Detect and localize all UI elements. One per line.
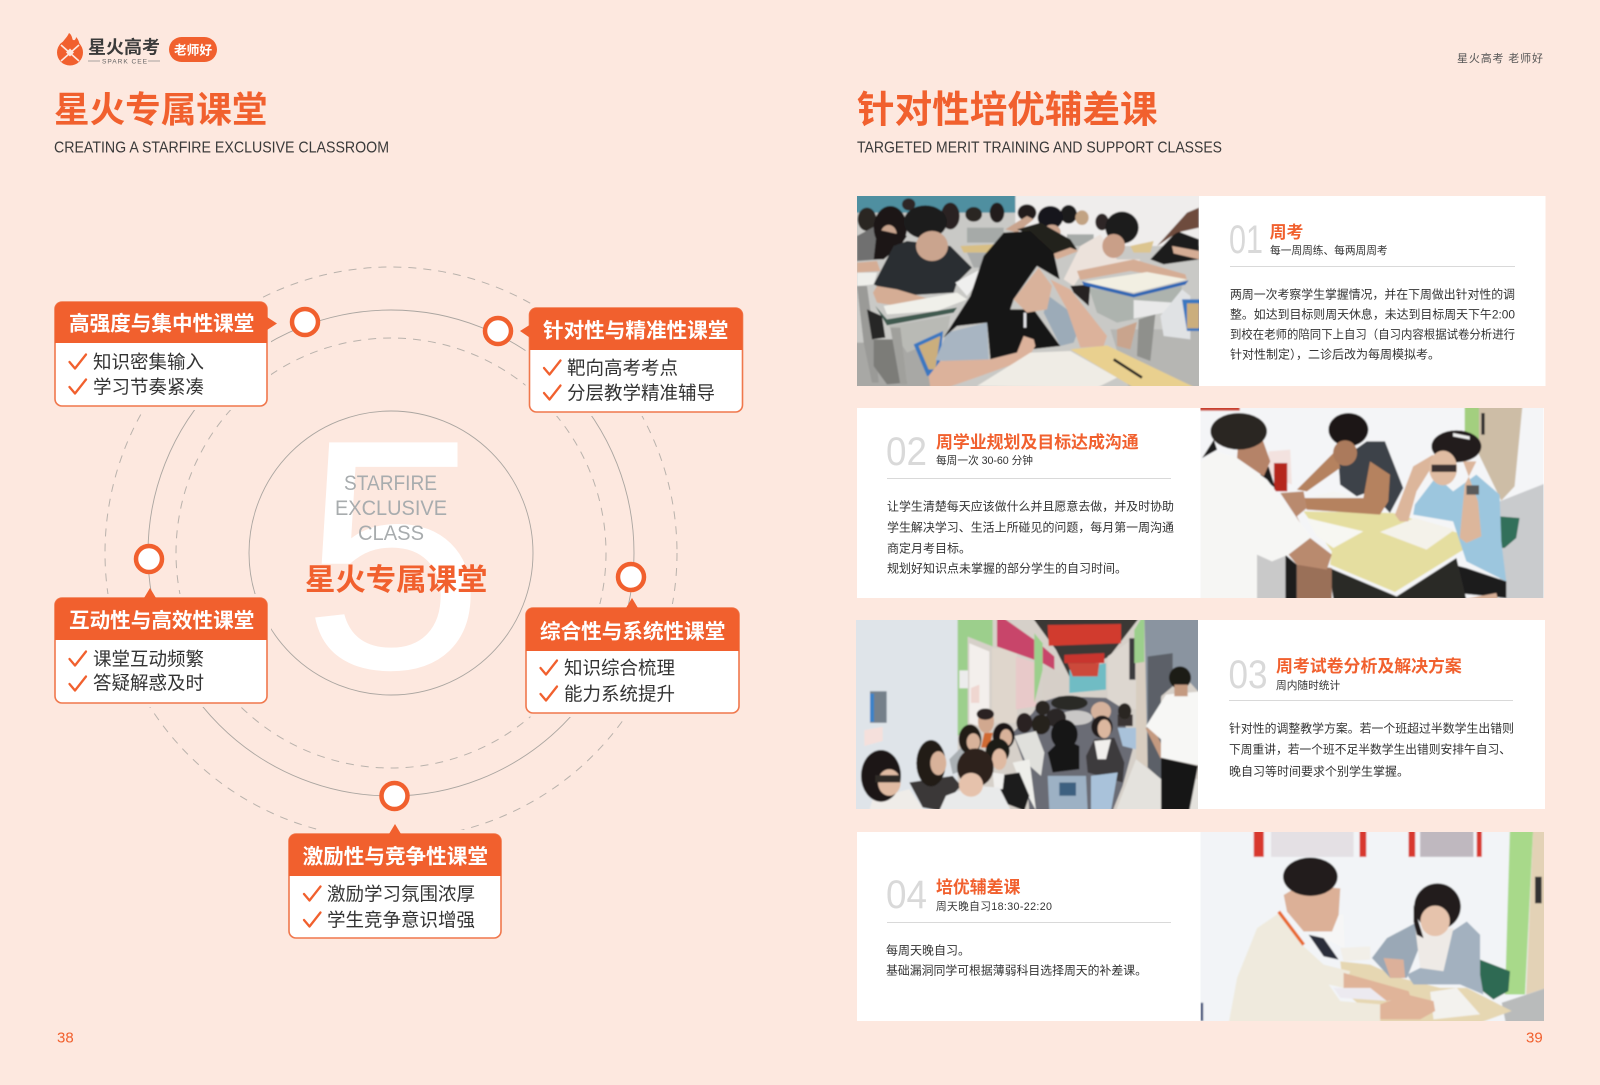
node 1 — [292, 309, 318, 335]
center English label — [335, 471, 447, 545]
node 4 — [618, 564, 644, 590]
body text — [1229, 720, 1514, 778]
panel 04: extra tutoring — [857, 825, 1550, 1028]
photo: one-on-one tutoring — [1200, 832, 1544, 1021]
card: 互动性与高效性课堂: 答疑解惑及时 — [93, 673, 204, 694]
logo badge — [169, 37, 217, 62]
panel 02: weekly planning — [857, 401, 1549, 605]
subtitle: right page: TARGETED MERIT TRAINING AND SUPPORT CLASSES — [857, 140, 1222, 156]
node 3 — [136, 546, 162, 572]
photo: teacher talking with students — [1200, 408, 1544, 598]
heading: 培优辅差课 — [936, 877, 1021, 897]
logo tagline: SPARK CEE — [102, 58, 148, 65]
big numeral 5: 5 — [302, 371, 484, 738]
card: 激励性与竞争性课堂 — [289, 824, 501, 938]
card: 激励性与竞争性课堂: 学生竞争意识增强 — [327, 910, 475, 931]
body text: 针对性制定），二诊后改为每周模拟考。 — [1230, 346, 1440, 361]
number 04: 04 — [886, 873, 927, 917]
center English label: STARFIRE — [344, 471, 437, 495]
body text: 学生解决学习、生活上所碰见的问题，每月第一周沟通 — [887, 519, 1174, 534]
panel 01: weekly test — [850, 189, 1546, 393]
center English label: EXCLUSIVE — [335, 496, 447, 520]
number 03: 03 — [1228, 653, 1268, 697]
photo: students in hallway — [856, 620, 1198, 809]
body text: 规划好知识点未掌握的部分学生的自习时间。 — [887, 560, 1127, 575]
title: right page: 针对性培优辅差课 — [857, 88, 1158, 130]
card: 针对性与精准性课堂: 分层教学精准辅导 — [567, 383, 715, 404]
icon: flame — [57, 33, 83, 66]
card: 综合性与系统性课堂 — [526, 598, 739, 713]
card: 高强度与集中性课堂: 高强度与集中性课堂 — [69, 311, 254, 335]
body text — [886, 942, 1147, 977]
diagram: five classroom features — [55, 267, 743, 938]
subheading: 每周一次 30-60 分钟 — [936, 454, 1033, 467]
body text: 两周一次考察学生掌握情况，并在下周做出针对性的调 — [1230, 286, 1515, 301]
body text: 整。如达到目标则周天休息，未达到目标周天下午2:00 — [1230, 306, 1515, 321]
card: 高强度与集中性课堂: 知识密集输入 — [93, 352, 204, 373]
running header: 星火高考 老师好 — [1457, 51, 1543, 65]
body text — [887, 498, 1174, 575]
body text: 商定月考目标。 — [887, 540, 971, 555]
number 02: 02 — [886, 430, 927, 474]
card: 综合性与系统性课堂: 知识综合梳理 — [564, 658, 675, 679]
logo tagline — [88, 58, 160, 65]
card: 综合性与系统性课堂: 能力系统提升 — [564, 684, 675, 705]
card: 高强度与集中性课堂 — [55, 302, 277, 406]
card: 互动性与高效性课堂: 课堂互动频繁 — [93, 649, 204, 670]
subtitle: left page: CREATING A STARFIRE EXCLUSIVE CLASSROOM — [54, 140, 389, 156]
card: 针对性与精准性课堂: 针对性与精准性课堂 — [543, 319, 728, 342]
subheading: 每一周周练、每两周周考 — [1270, 244, 1388, 257]
card: 综合性与系统性课堂: 综合性与系统性课堂 — [540, 619, 725, 643]
node 2 — [485, 318, 511, 344]
body text — [1230, 286, 1515, 361]
body text: 到校在老师的陪同下上自习（自习内容根据试卷分析进行 — [1230, 326, 1515, 341]
concentric rings — [105, 267, 677, 839]
body text: 让学生清楚每天应该做什么并且愿意去做，并及时协助 — [887, 498, 1174, 513]
logo: Spark CEE — [57, 33, 217, 66]
body text: 下周重讲，若一个班不足半数学生出错则安排午自习、 — [1229, 741, 1511, 756]
body text: 基础漏洞同学可根据薄弱科目选择周天的补差课。 — [886, 962, 1147, 977]
center English label: CLASS — [358, 521, 424, 545]
logo wordmark: 星火高考 — [88, 36, 160, 58]
number 01: 01 — [1229, 218, 1263, 262]
page number 39: 39 — [1526, 1030, 1543, 1046]
logo badge: 老师好 — [174, 42, 212, 58]
card: 激励性与竞争性课堂: 激励性与竞争性课堂 — [303, 845, 488, 868]
title: left page: 星火专属课堂 — [54, 90, 267, 130]
card: 高强度与集中性课堂: 学习节奏紧凑 — [93, 377, 204, 398]
photo: students taking an exam — [857, 196, 1199, 386]
heading: 周考试卷分析及解决方案 — [1276, 656, 1462, 676]
card: 针对性与精准性课堂: 靶向高考考点 — [567, 358, 678, 379]
subheading: 周天晚自习18:30-22:20 — [936, 900, 1052, 913]
body text: 晚自习等时间要求个别学生掌握。 — [1229, 763, 1409, 778]
page number 38: 38 — [57, 1030, 74, 1046]
body text: 每周天晚自习。 — [886, 942, 970, 957]
node 5 — [382, 783, 408, 809]
card: 针对性与精准性课堂 — [520, 308, 743, 412]
panel 03: paper analysis — [849, 613, 1545, 816]
card: 互动性与高效性课堂 — [55, 588, 267, 703]
card: 激励性与竞争性课堂: 激励学习氛围浓厚 — [327, 884, 475, 905]
subheading: 周内随时统计 — [1276, 679, 1340, 692]
heading: 周考 — [1270, 223, 1303, 242]
center Chinese label: 星火专属课堂 — [305, 563, 487, 597]
heading: 周学业规划及目标达成沟通 — [936, 432, 1139, 452]
body text: 针对性的调整教学方案。若一个班超过半数学生出错则 — [1229, 720, 1514, 735]
card: 互动性与高效性课堂: 互动性与高效性课堂 — [69, 608, 254, 632]
